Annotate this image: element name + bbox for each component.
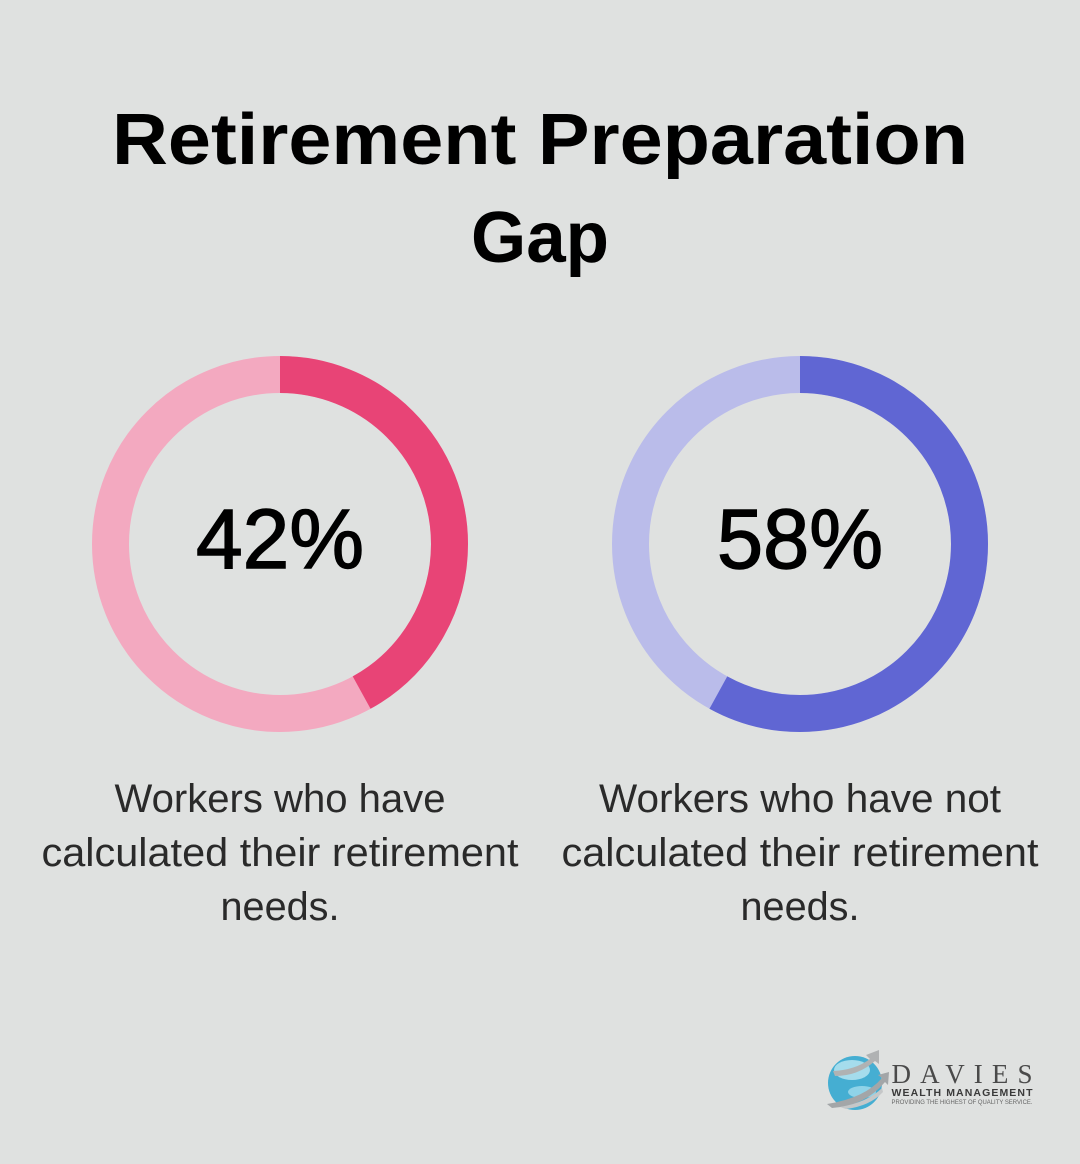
title: Gap: [471, 198, 609, 278]
tagline: PROVIDING THE HIGHEST OF QUALITY SERVICE.: [892, 1099, 1033, 1106]
title: Retirement Preparation: [112, 100, 968, 180]
description: not calculated: calculated their retirement: [562, 831, 1038, 875]
value: 42%: 42%: [196, 492, 364, 586]
wordmark: Wealth Management: WEALTH MANAGEMENT: [892, 1087, 1033, 1099]
description: not calculated: [562, 777, 1038, 929]
description: not calculated: Workers who have not: [599, 777, 1001, 821]
value: 58%: 58%: [717, 492, 883, 586]
description: not calculated: needs.: [740, 885, 860, 929]
description: calculated: needs.: [220, 885, 340, 929]
panel: workers who have not calculated: [562, 374, 1038, 929]
wordmark: DAVIES: DAVIES: [892, 1059, 1032, 1089]
donut chart: 58%: [630, 374, 970, 714]
title: [112, 100, 968, 278]
donut chart: 42%: [110, 374, 450, 714]
description: calculated: [42, 777, 518, 929]
panel: workers who have calculated: [42, 374, 518, 929]
logo: Davies Wealth Management: [827, 1050, 1033, 1110]
description: calculated: Workers who have: [114, 777, 446, 821]
description: calculated: calculated their retirement: [42, 831, 518, 875]
icon: globe with arrows: [827, 1050, 889, 1110]
